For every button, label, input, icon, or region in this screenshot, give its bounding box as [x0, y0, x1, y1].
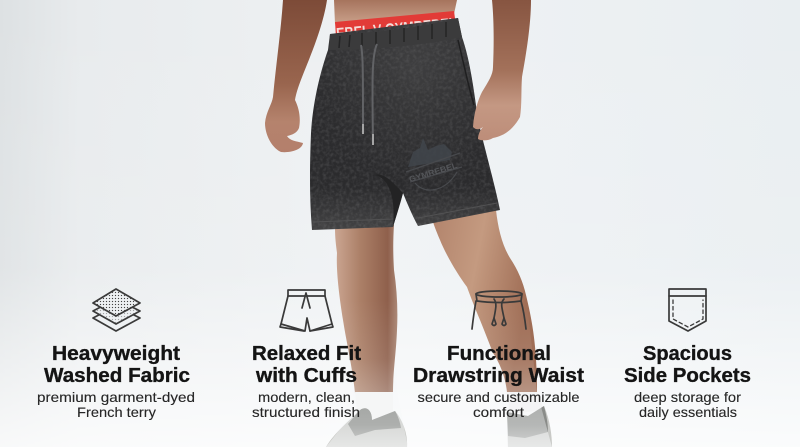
description: modern, clean, — [258, 389, 355, 405]
drawstrings — [361, 44, 377, 145]
tonal logo: GYMREBEL — [408, 161, 458, 184]
heading: Relaxed Fit — [252, 343, 361, 365]
right shoe — [507, 406, 552, 447]
red waistband with brand text — [335, 11, 455, 34]
description: structured finish — [252, 404, 360, 420]
feature 4: spacious side pockets — [624, 289, 751, 420]
red waistband with brand text: REBEL V GYMREBEL — [326, 16, 458, 44]
shorts hem — [313, 203, 497, 222]
icon: fabric layers — [93, 289, 140, 331]
description: premium garment-dyed — [37, 389, 195, 405]
left leg — [335, 225, 397, 393]
right leg — [433, 210, 537, 392]
description: daily essentials — [639, 404, 737, 420]
description: deep storage for — [634, 389, 741, 405]
right sock — [507, 392, 544, 414]
feature 3: functional drawstring waist — [413, 291, 584, 420]
torso — [334, 0, 457, 24]
description: secure and customizable — [418, 389, 580, 405]
feature 2: relaxed fit with cuffs — [252, 290, 361, 420]
heading: Drawstring Waist — [413, 365, 584, 387]
description: French terry — [77, 404, 156, 420]
leg fade — [326, 328, 552, 447]
icon: shorts — [280, 290, 333, 331]
right arm — [473, 0, 531, 140]
icon: pocket — [669, 289, 706, 331]
heading: Spacious — [643, 343, 732, 365]
left shoe — [326, 408, 407, 447]
shorts — [305, 15, 505, 235]
heading: Functional — [447, 343, 551, 365]
description: comfort — [473, 404, 524, 420]
photo: model wearing shorts — [265, 0, 560, 447]
icon: drawstring waist — [472, 291, 526, 329]
heading: with Cuffs — [255, 365, 357, 387]
left arm — [265, 0, 327, 152]
crotch shadow — [375, 175, 403, 227]
heading: Washed Fabric — [44, 365, 190, 387]
tonal logo — [406, 138, 462, 190]
elastic waist — [329, 18, 462, 50]
heading: Heavyweight — [52, 343, 180, 365]
heading: Side Pockets — [624, 365, 751, 387]
left sock — [355, 392, 393, 424]
feature 1: heavyweight washed fabric — [37, 289, 195, 420]
pocket seam — [458, 40, 474, 105]
